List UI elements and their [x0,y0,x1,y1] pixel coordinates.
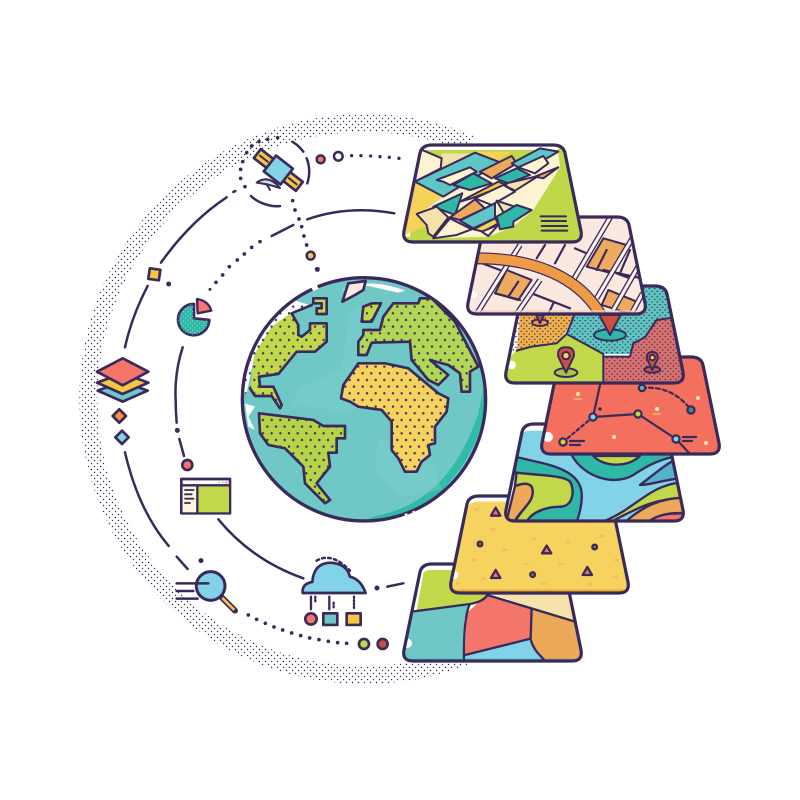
layer 4: network on red [542,357,719,456]
continent: eurasia [358,298,478,392]
parcel underlay [420,152,560,238]
red and white nodes [307,152,343,260]
icon: map window [181,479,230,513]
city blocks [495,238,637,314]
contour bands [507,456,682,520]
icon: cloud network [303,558,366,625]
lower orbit arcs [125,400,403,587]
layer 7: land zones [400,560,587,667]
location pins [532,315,660,377]
land zones [403,570,583,662]
continent: greenland [313,298,327,314]
layer 2: street map [467,215,650,317]
outline gaps [312,287,415,516]
continent: north america [250,305,327,408]
dotted orbit [166,136,401,291]
icon: magnifier search [177,572,235,611]
icon: pie chart [178,299,211,335]
legend lines [541,216,567,231]
orbits and upper-left icons [97,136,401,402]
layer 1: land parcels [400,145,587,243]
white top-left highlight [240,300,310,393]
region fills [516,316,573,350]
network lines [563,385,696,456]
island: arctic [342,281,366,302]
parcels [415,148,558,238]
outer orbit arcs [125,191,394,400]
network nodes [559,385,695,446]
layer 5: contour map [506,424,687,522]
sand marks [456,509,619,584]
icon: yellow diamond [148,268,160,280]
dotted outer ring [88,123,470,675]
triangles [491,508,592,578]
ocean [242,278,486,521]
globe [240,278,486,522]
orbit dots [175,428,379,645]
point markers [478,542,597,577]
layer 3: regions with location pins [503,283,687,387]
highway arc [477,258,602,317]
ocean shading [240,281,485,522]
orbits and lower-left icons [113,400,403,649]
icon: diamonds [113,409,129,444]
streets [477,245,642,314]
globe outline [242,278,486,521]
island: uk [362,303,381,322]
continent: africa [341,363,448,472]
icon: satellite [251,142,309,206]
icon: stacked layers [97,358,148,402]
layer 6: yellow points [447,496,633,597]
node circles [182,460,388,649]
small yellow stars [576,392,708,445]
continent: south america [259,413,345,503]
